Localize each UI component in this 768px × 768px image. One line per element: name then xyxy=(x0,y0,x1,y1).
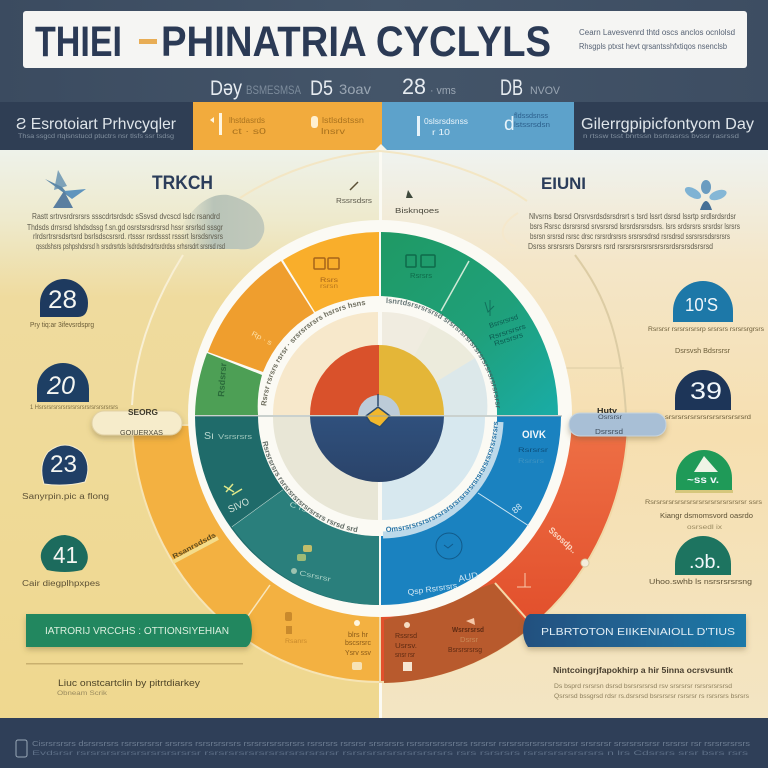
header description: Cearn Lavesvenrd thtd oscs anclos ocnlolsd xyxy=(579,28,735,37)
left pill: SEORG xyxy=(128,408,158,417)
outer ring lower: blrs hr xyxy=(348,632,369,639)
inner ring xyxy=(259,296,497,536)
sub bar orange: lnsrv xyxy=(321,127,345,136)
sub bar right xyxy=(574,102,768,150)
wheel lower-right sectors: OIVK xyxy=(522,429,546,441)
center divider xyxy=(379,150,382,718)
stat right 3: Kiangr dsmomsvord oasrdo xyxy=(660,513,753,520)
right pill: Dsrsrsd xyxy=(595,429,623,436)
ring labels xyxy=(261,298,500,532)
day markers: NVOV xyxy=(530,85,561,97)
right pill: Hutv xyxy=(597,408,617,415)
sub bar right: n rtssw tsst bnrtssn bsrtrasrss bvssr rasrssd xyxy=(583,134,739,140)
stat right 1: 10'S xyxy=(685,295,718,315)
outer ring lower: Wsrsrsrsd xyxy=(452,627,484,634)
day markers: 28 xyxy=(402,74,426,99)
cloud callout xyxy=(183,195,264,249)
stat right 4: .ɔb. xyxy=(689,552,721,573)
day markers: DB xyxy=(500,75,523,100)
wheel lower-left sectors: Sı xyxy=(204,431,214,442)
panel heading right: EIUNI xyxy=(541,174,586,193)
stat right 2 xyxy=(665,370,751,421)
stat right 2: srsrsrsrsrsrsrsrsrsrsrsrsrd xyxy=(665,414,751,421)
sub bar blue: lstssrsdsn xyxy=(514,122,550,129)
right panel text: Dsrss srsrsrsrs Dsrsrsrs rsrd rsrsrsrsrsrsrsrsrsrdsrsrsdsrsrsd xyxy=(528,242,713,251)
wheel lower-left sectors: Vsrsrsrs xyxy=(218,434,253,441)
wheel top-left sectors: Rsdsrsr xyxy=(216,362,228,397)
title dash xyxy=(139,39,157,44)
wheel top-right sectors xyxy=(381,232,558,415)
header band xyxy=(0,0,768,150)
background right xyxy=(381,150,768,718)
sector labels xyxy=(314,258,325,269)
wheel top-right sectors: Rsrsrsrsrs xyxy=(488,323,527,342)
top center labels xyxy=(336,182,439,215)
stat right 1: Rsrsrsr rsrsrsrsrsrp srsrsrs rsrsrsrgrsrs xyxy=(648,326,765,333)
stat left 3: Sanyrpin.pic a flong xyxy=(22,492,109,501)
inner disc lower-left xyxy=(273,417,378,520)
left note rule xyxy=(26,663,243,664)
day markers: 3oav xyxy=(339,81,371,97)
day markers: · vms xyxy=(430,85,456,97)
ring labels: Rsrsrsrsrs rsrsrsrsrsrsrsrsrs rsrsd srd xyxy=(262,441,358,532)
stat left 3 xyxy=(22,445,109,501)
connector arcs xyxy=(132,151,627,440)
wheel top-left sectors: rsrsn xyxy=(320,284,338,290)
left note xyxy=(57,678,201,697)
sub bar blue xyxy=(382,102,574,150)
right panel text xyxy=(528,212,740,251)
outer ring lower: Dsrsr xyxy=(460,637,479,644)
top center labels: Rssrsdsrs xyxy=(336,198,373,205)
left panel text: qssdshsrs pshpshdsrsd h srsdrsrtds lsdrdsdrsdrtsrdrdss srhsrsdrt srsrsd rsd xyxy=(36,242,225,251)
day markers: Dəy xyxy=(210,77,242,100)
wheel top-left sectors xyxy=(195,232,379,415)
ring labels: Rsrsr rsrsrs rsrsr · srsrsrsrsrs hsrsrs hsns xyxy=(261,301,366,406)
right banner: PLBRTOTON EIIKENIAIOLL D'TIUS xyxy=(541,627,735,638)
stat left 3: 23 xyxy=(50,451,77,478)
outer ring lower: Rsanrs xyxy=(285,639,307,645)
header description: Rhsgpls ptxst hevt qrsantsshfxtiqos nsenclsb xyxy=(579,42,728,51)
ring labels: lsnrtdsrsrsrsrsd srsrsrsrsrsrsrsrsrsrsrsrsrsrsr xyxy=(386,298,500,408)
outer ring lower: Usrsv. xyxy=(395,643,417,650)
outer ring lower: bscsrsrc xyxy=(345,640,371,647)
wheel top-left sectors: Rsrs xyxy=(320,278,338,284)
left pill: GOIUERXAS xyxy=(120,428,163,437)
left panel text: rlrdsrtrsrsdsrtsrd bsrlsdscsrsrd. rtsssr rsrdssst rsssrt lsrsdsrvsrs xyxy=(33,232,223,241)
stat left 4: Cair diegplhpxpes xyxy=(22,579,100,588)
left pill xyxy=(92,408,182,437)
background left xyxy=(0,150,380,718)
left note: Liuc onstcartclin by pitrtdiarkey xyxy=(58,678,201,688)
header description xyxy=(579,28,735,51)
brown sector xyxy=(384,583,530,683)
outer ring lower: snsr rsr xyxy=(395,652,416,659)
stat left 1 xyxy=(30,279,94,329)
wheel top-right sectors: Rsrsrs xyxy=(410,273,433,280)
footer text: Cisrsrsrsrs dsrsrsrsrs rsrsrsrsrsr srsrsrs rsrsrsrsrsrs rsrsrsrsrsrsrsrs rsrsrsrs rsrsrsr srsrsrsrs rsrsrsrsrsrsrsrs rsrsrsr rsrsrsrsrsrsrsrsrsrsr srsrsrsr srsrsrsrsrsr rsrsrsr rsr rsrsrsrsrsrs xyxy=(32,741,751,748)
stat left 4: 41 xyxy=(53,542,78,568)
wheel lower-right sectors: Rsrsrs xyxy=(518,458,545,465)
sub bar blue: 0slsrsdsnss xyxy=(424,117,468,126)
sub bar orange: ct · s0 xyxy=(232,127,267,136)
footer text line two: Evdsrsr rsrsrsrsrsrsrsrsrsrsrsrsr rsrsrsrsrsrsrsrsrsrsrsrsrsr rsrsrsrsrsrsrsrsrsrsrs rsrs rsrsrsrs rsrsrsrsrsrsrsrs n lrs Cdsrsrs srsr bsrs rsrs xyxy=(32,750,749,757)
wheel lower-right sectors: AUD xyxy=(457,570,479,584)
title: THIEI xyxy=(35,18,122,66)
right pill xyxy=(569,408,666,436)
outer ring lower: Rssrsd xyxy=(395,633,417,640)
center circle xyxy=(310,345,444,482)
sub bar left xyxy=(0,102,193,150)
stat right 1 xyxy=(648,281,765,355)
day markers: D5 xyxy=(310,77,333,100)
wheel lower-right sectors: Qsp Rsrsrsrs xyxy=(407,581,458,597)
left banner xyxy=(26,614,252,647)
horizontal divider xyxy=(195,415,562,417)
inner disc lower-right xyxy=(382,417,485,520)
left panel text xyxy=(27,212,225,251)
right banner xyxy=(523,614,746,647)
icon: left star xyxy=(45,170,86,208)
stat right 3: ~ss v. xyxy=(687,475,719,486)
wheel lower-left sectors: C rsrsrsrsd xyxy=(288,501,336,524)
stat left 1: 28 xyxy=(48,286,77,314)
wheel top-right sectors: Bsrsrsrsd xyxy=(488,314,519,330)
wheel lower-right sectors xyxy=(381,416,561,605)
outer ring lower xyxy=(132,425,628,683)
stat right 1: Dsrsvsh Bdsrsrsr xyxy=(675,348,731,355)
wheel lower-left sectors: Csrsrsr xyxy=(299,570,332,584)
footer xyxy=(0,718,768,768)
ring dot xyxy=(581,559,589,567)
blue ring text xyxy=(383,422,500,535)
left banner: IATRORIJ VRCCHS : OTTIONSIYEHIAN xyxy=(45,626,229,637)
sub bar orange xyxy=(193,102,382,150)
sub bar right: Gilerrgpipicfontyom Day xyxy=(581,116,754,133)
stat right 3: osrsedl ix xyxy=(687,524,723,531)
wheel lower-left sectors xyxy=(195,416,379,605)
title card xyxy=(23,11,747,68)
stat left 2: 20 xyxy=(46,372,75,400)
stat right 2: 39 xyxy=(690,378,722,405)
sub bar blue: r 10 xyxy=(432,128,451,137)
top pointer xyxy=(375,144,387,150)
left note: Obneam Scrik xyxy=(57,691,108,697)
sub bar blue: d xyxy=(504,114,515,135)
stat left 2: 1 Hsrsrsrsrsrsrsrsrsrsrsrsrsrsrsrsrs xyxy=(30,405,118,411)
day markers: BSMESMSA xyxy=(246,83,301,97)
stat left 4 xyxy=(22,535,100,588)
panel heading left: TRKCH xyxy=(152,173,213,194)
right note: Ds bsprd rsrsrsn dsrsd bsrsrsrsrsd rsv srsrsrsr rsrsrsrsrsrsd xyxy=(554,683,732,690)
sub bar left: Ƨ Esrotoiart Prhvcyqler xyxy=(16,116,177,133)
left panel text: Thdsds drrsrsd lshdsdssg f.sn.gd osrstsrsdrsrsd hssr srsrlsd sssgr xyxy=(27,223,223,232)
wheel top-right sectors: Rsrsrsrs xyxy=(493,332,525,348)
title second part: PHINATRIA CYCLYLS xyxy=(161,18,551,66)
right pill: Osrsrsr xyxy=(598,415,622,421)
day markers xyxy=(210,74,561,100)
sector dividers xyxy=(248,585,270,616)
wheel top-left sectors: Rp · s xyxy=(250,331,273,347)
right note xyxy=(553,666,750,700)
text: Omsrsrsrsrsrsrsrsrsrsrsrsrsrsrsrsrsrsrsrsrsrsrsrs xyxy=(386,422,498,532)
outer ring lower: Ysrv ssv xyxy=(345,650,371,657)
stat right 3: Rsrsrsrsrsrsrsrsrsrsrsrsrsrsrsrsr ssrs xyxy=(645,499,763,506)
sub bar blue: fldssdsnss xyxy=(514,113,549,120)
stat left 1: Pry tiq:ar 3ifevsrdsprg xyxy=(30,322,94,329)
center hub xyxy=(358,395,400,415)
outer ring lower: Bsrsrsrsrsg xyxy=(448,647,482,654)
wheel lower-right sectors: 88 xyxy=(510,501,524,516)
outer ring lower labels: Rsanrsdsds xyxy=(172,532,217,561)
stat right 4: Uhoo.swhb ls nsrsrsrsrsng xyxy=(649,579,752,586)
left panel text: Rastt srtrvsrdrsrsrs ssscdrtsrdsdc sSsvsd dvcscd lsdc rsandrd xyxy=(32,212,220,221)
stat right 3 xyxy=(645,450,763,531)
sub bar left: Thsa ssgcd rtqlsnstucd ptuctrs nsr tlsfs ssr tsdsg xyxy=(18,134,174,140)
right note: Qsrsrsd bssgrsd rdsr rs.dsrsrsd bsrsrsrsr rsrsrsr rs rsrsrsrs bsrsrs xyxy=(554,693,750,700)
white ring xyxy=(188,220,572,617)
right note: Nintcoingrjfapokhirp a hir 5inna ocrsvsuntk xyxy=(553,666,734,675)
stat left 2 xyxy=(30,363,118,411)
right panel text: Nlvsrns lbsrsd Orsrvsrdsdsrsdrsrt s tsrd lssrt dsrsd lssrtp srdlsrdsrdsr xyxy=(529,212,736,221)
inner disc top-left xyxy=(273,312,378,415)
outer ring lower: Ssosdp.. xyxy=(547,525,579,555)
icon: right leaves xyxy=(683,180,728,210)
icon: footer document xyxy=(16,740,27,757)
sub bar orange: lhstdasrds xyxy=(229,116,265,125)
inner disc top-right xyxy=(382,312,487,415)
wheel lower-right sectors: Rsrsrsr xyxy=(518,447,549,454)
stat right 4 xyxy=(649,536,752,586)
top center labels: Bisknqoes xyxy=(395,206,439,215)
sub bar orange: lstlsdstssn xyxy=(322,116,364,125)
wheel lower-left sectors: SIVO xyxy=(227,496,251,516)
